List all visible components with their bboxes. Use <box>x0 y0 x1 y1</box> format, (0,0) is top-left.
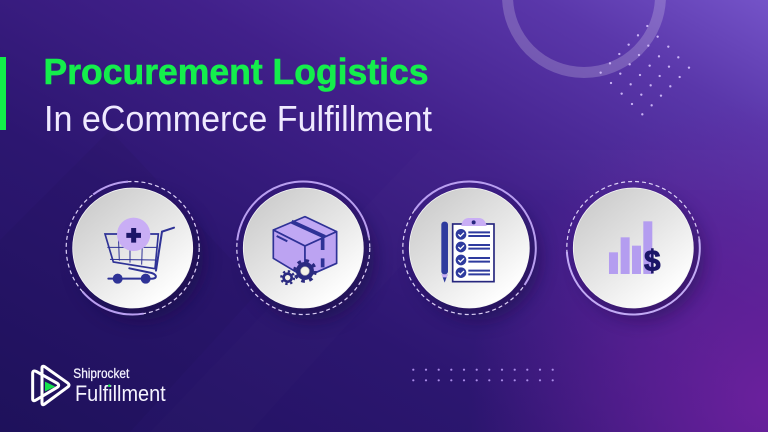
subtitle: In eCommerce Fulfillment <box>44 98 432 139</box>
title: Procurement Logistics <box>44 51 428 92</box>
icon: shopping cart with plus <box>105 218 174 284</box>
decorative ring top right <box>508 0 660 72</box>
logo green dot <box>108 384 111 387</box>
panel: chart circle <box>559 174 707 322</box>
dot grid bottom <box>412 369 554 381</box>
icon: bar chart with dollar <box>609 221 660 278</box>
logo <box>33 366 166 406</box>
icon: box with gears <box>273 217 337 284</box>
logo wordmark top: Shiprocket <box>73 366 130 381</box>
logo mark <box>33 366 69 405</box>
logo wordmark bottom: Fulfillment <box>75 381 166 406</box>
green accent bar <box>0 57 6 130</box>
panel: checklist circle <box>377 155 562 341</box>
dot grid top right <box>599 25 690 115</box>
panel: box circle <box>229 174 377 322</box>
panel: cart circle <box>40 155 226 341</box>
icon: clipboard and pen <box>441 218 494 283</box>
icon: bar chart with dollar: $ <box>644 245 660 278</box>
